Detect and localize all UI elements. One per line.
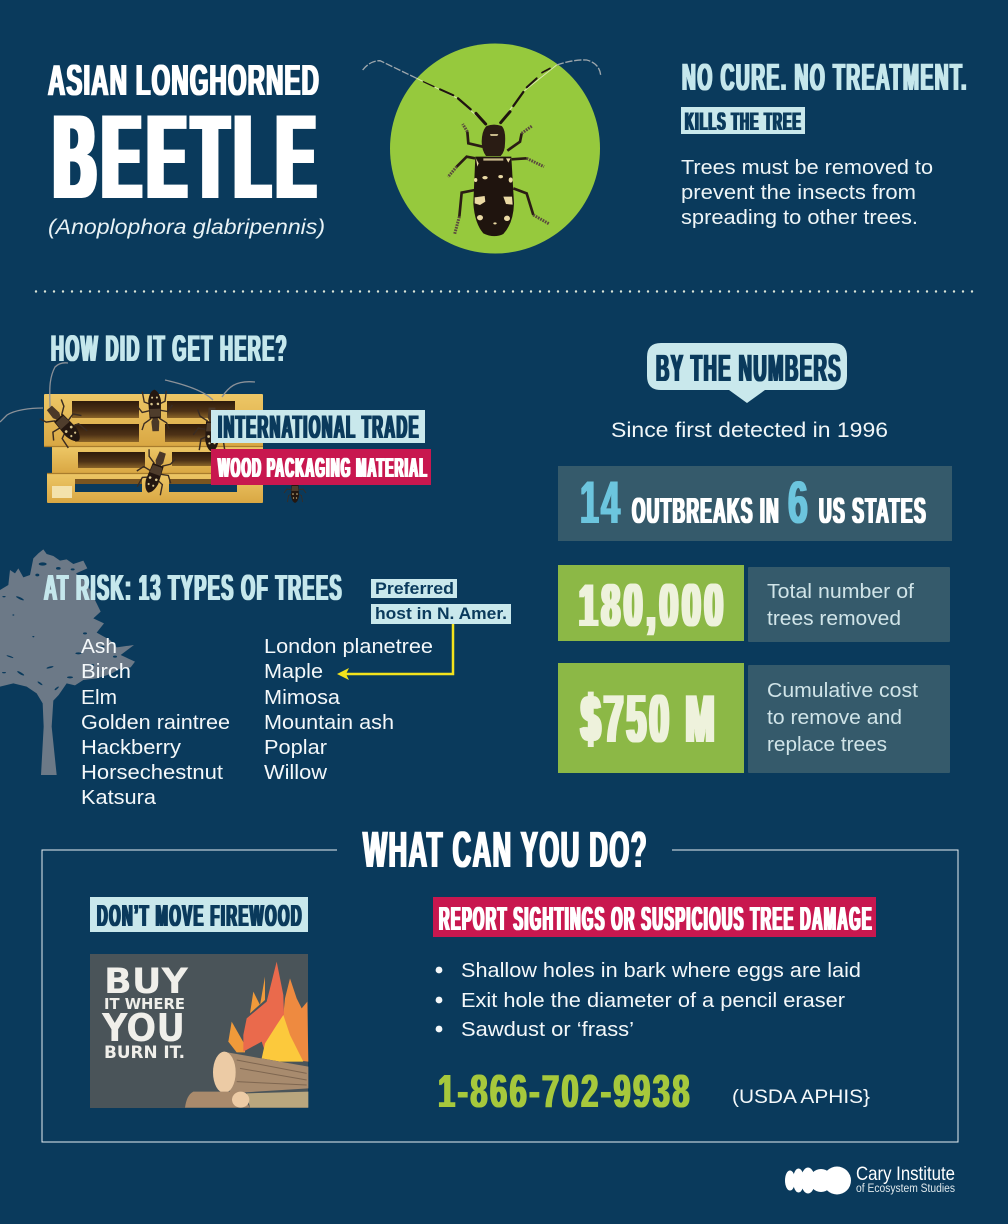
heading: at risk: AT RISK: 13 TYPES OF TREES [44,567,343,608]
tree list: column two [264,635,433,784]
tag: preferred host [371,579,511,624]
icon: beetle on green circle [363,44,601,254]
poster: buy it where you burn it: IT WHERE [104,995,185,1013]
tree list: column two: Maple [264,660,323,683]
tree list: column one: Elm [81,686,117,709]
tree list: column one [81,635,230,809]
poster: buy it where you burn it: YOU [101,1006,185,1050]
text: usda aphis: (USDA APHIS} [732,1086,871,1108]
title [48,56,325,239]
tag: kills the tree: KILLS THE TREE [685,108,802,136]
tag: don't move firewood [90,897,308,933]
tree list: column two: Mimosa [264,686,341,709]
heading: what can you do: WHAT CAN YOU DO? [363,821,648,878]
callout: no cure [681,57,968,229]
bullet list: signs: Sawdust or ‘frass’ [461,1018,634,1041]
tree list: column one: Golden raintree [81,711,230,734]
arrow: to maple [337,624,453,680]
tree list: column one: Hackberry [81,736,182,759]
stat: outbreaks: 14 [580,469,622,536]
bullet list: signs [436,959,861,1041]
stat: trees removed: trees removed [767,607,901,630]
panel: what can you do: DON’T MOVE FIREWOOD [97,898,303,933]
stat: outbreaks: OUTBREAKS IN [632,490,780,531]
stat: cumulative cost: $750 M [581,681,718,757]
poster: buy it where you burn it: BURN IT. [104,1043,185,1063]
speech bubble: by the numbers [647,343,847,403]
text: since first detected: Since first detected in 1996 [611,419,888,442]
infographic: INTERNATIONAL TRADE [218,409,420,445]
tree list: column two: Poplar [264,736,327,759]
scientific name: (Anoplophora glabripennis) [48,215,325,239]
bullet list: signs: Shallow holes in bark where eggs are laid [461,959,861,982]
icon: wooden pallet with beetles [0,363,306,503]
stat: outbreaks: 6 [788,469,810,536]
text: removal explanation: spreading to other trees. [681,206,918,229]
stat: trees removed: 180,000 [579,572,727,639]
title line: Asian Longhorned: ASIAN LONGHORNED [48,56,320,105]
bullet list: signs: Exit hole the diameter of a pencil eraser [461,989,845,1012]
tag: wood packaging material [211,449,431,485]
logo: cary institute: Cary Institute [856,1163,955,1185]
infographic: BEETLE [54,90,322,224]
text: removal explanation [681,156,933,229]
phone number: 1-866-702-9938 [438,1065,692,1117]
poster: buy it where you burn it: BUY [104,962,189,1002]
tree list: column two: London planetree [264,635,433,658]
logo: cary institute [785,1163,955,1195]
stat: cumulative cost [558,663,950,773]
tree list: column one: Birch [81,660,131,683]
tag: kills the tree [681,107,805,136]
stat: cumulative cost: Cumulative cost [767,679,918,702]
logo: cary institute: of Ecosystem Studies [856,1183,955,1195]
stat: cumulative cost: to remove and [767,706,902,729]
tree list: column one: Horsechestnut [81,761,223,784]
poster: buy it where you burn it [90,954,308,1108]
tag: preferred host: Preferred [375,580,454,598]
icon: tree silhouette [0,549,135,775]
tree list: column one: Katsura [81,786,157,809]
tag: preferred host: host in N. Amer. [375,605,507,623]
text: removal explanation: Trees must be removed to [681,156,933,179]
text: removal explanation: prevent the insects from [681,181,916,204]
tree list: column one: Ash [81,635,117,658]
infographic: WOOD PACKAGING MATERIAL [218,452,428,483]
tree list: column two: Mountain ash [264,711,394,734]
stat: trees removed [558,565,950,642]
tag: international trade [211,409,425,445]
infographic: HOW DID IT GET HERE? [51,328,288,369]
panel: what can you do [42,821,958,1142]
stat: cumulative cost: replace trees [767,733,887,756]
stat: trees removed: Total number of [767,580,914,603]
stat: outbreaks [558,466,952,541]
tree list: column two: Willow [264,761,327,784]
